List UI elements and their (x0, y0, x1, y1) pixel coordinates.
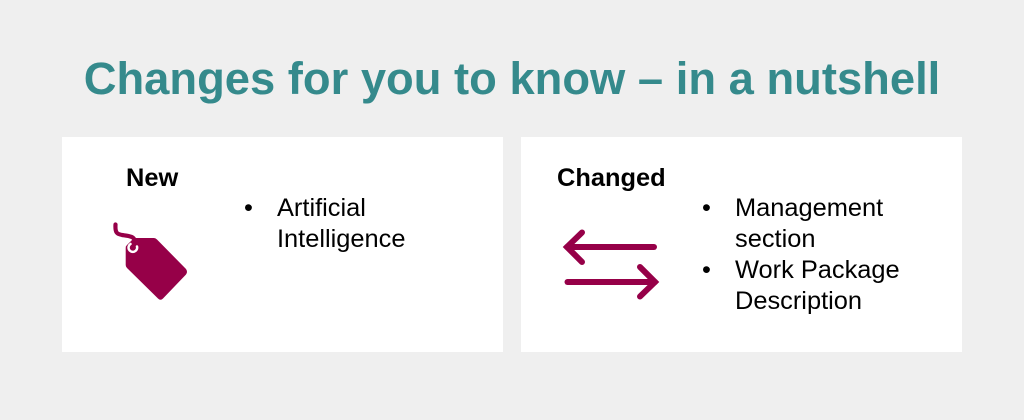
bullet 2: • (702, 256, 711, 284)
bullet: • (244, 194, 253, 222)
panel: new (62, 137, 503, 352)
list item 1 (735, 194, 883, 253)
list item 1: Management (735, 194, 883, 222)
list item 2 (735, 256, 900, 315)
heading: changed: Changed (557, 164, 666, 192)
list item: Intelligence (277, 225, 405, 253)
title: Changes for you to know – in a nutshell (84, 53, 940, 104)
list item: Artificial (277, 194, 366, 222)
heading: new: New (126, 164, 178, 192)
icon: price tag (113, 222, 187, 300)
bullet list: changed (702, 194, 900, 315)
bullet 1: • (702, 194, 711, 222)
list item (277, 194, 405, 253)
bullet list: new (244, 194, 405, 253)
list item 2: Description (735, 287, 862, 315)
list item 1: section (735, 225, 815, 253)
icon: swap arrows (562, 230, 660, 300)
panel: changed (521, 137, 962, 352)
list item 2: Work Package (735, 256, 900, 284)
